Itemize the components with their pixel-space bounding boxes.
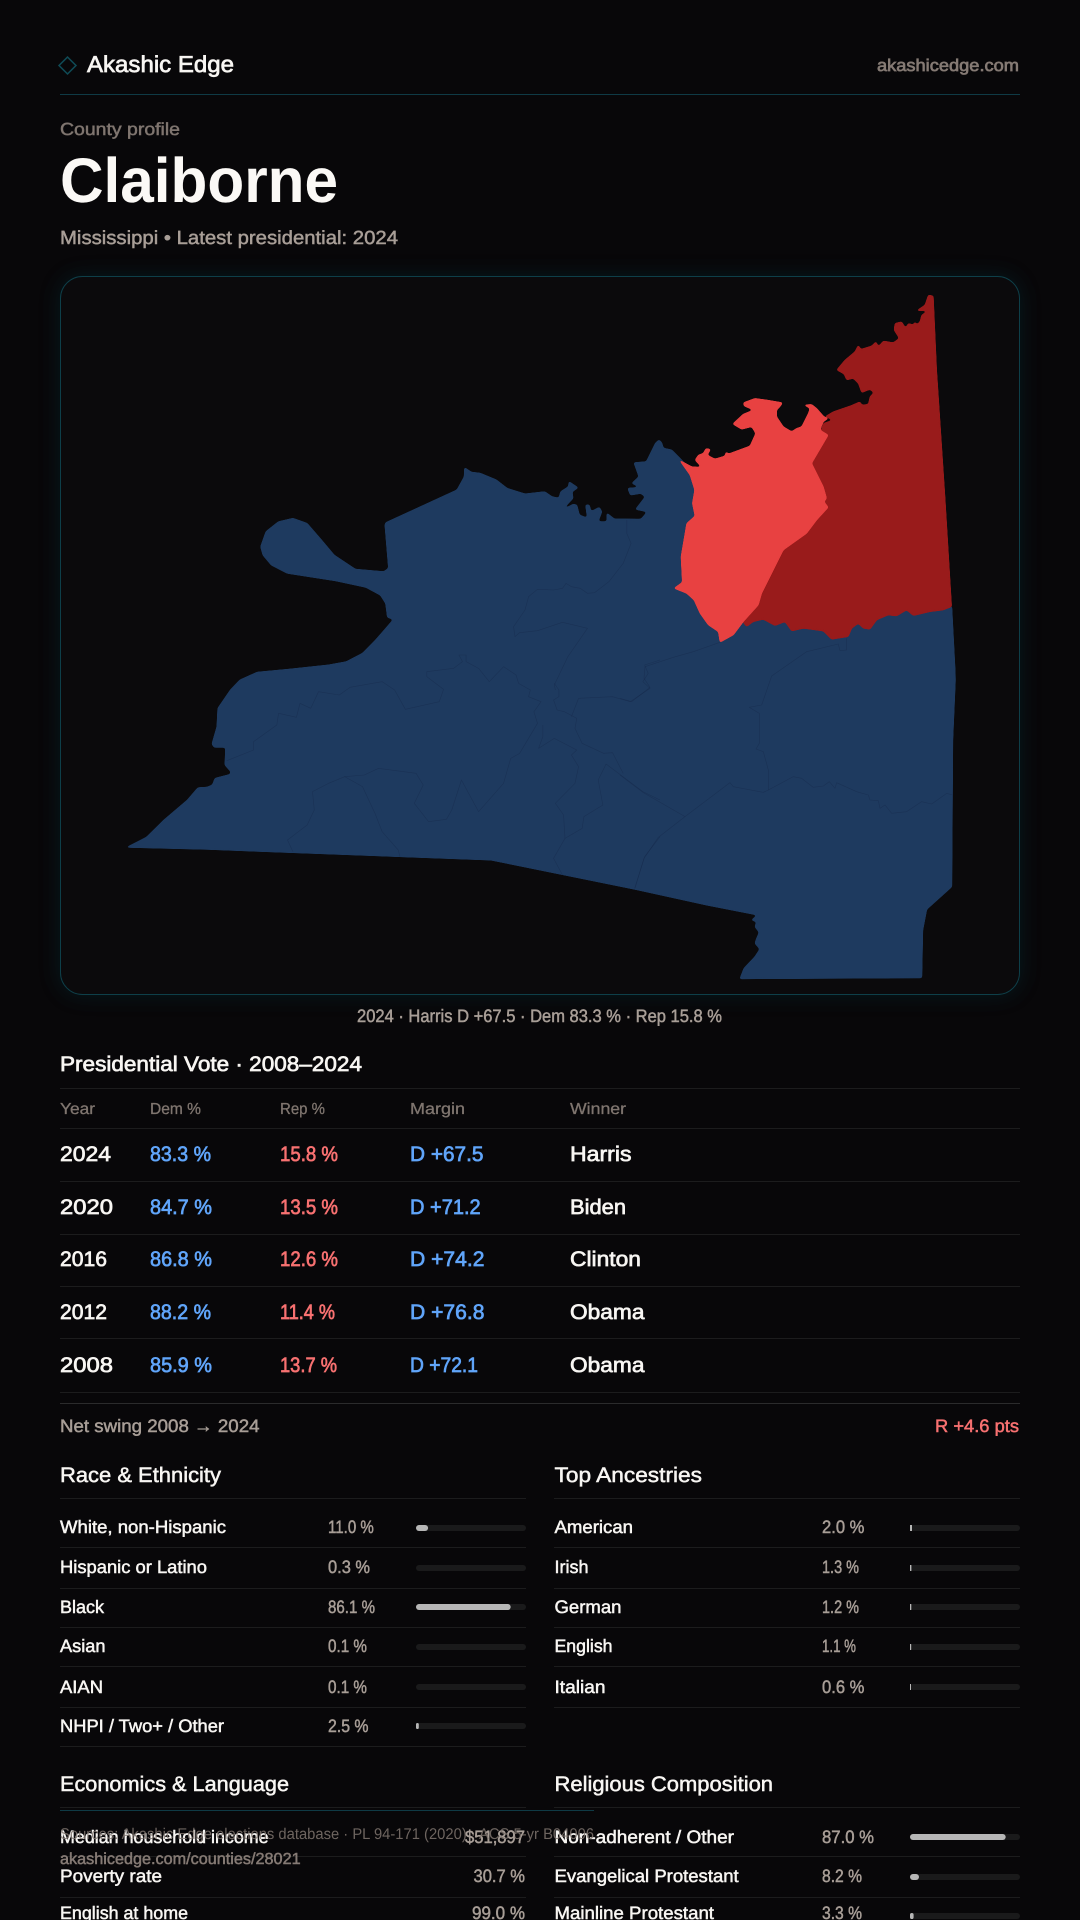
- title: Claiborne: [60, 146, 338, 216]
- row: NHPI / Two+ / Other: 2.5 %: [328, 1716, 368, 1736]
- map: blue precincts: [127, 440, 955, 979]
- row: Poverty rate: Poverty rate: [60, 1866, 162, 1886]
- table header row: Rep %: [280, 1101, 325, 1118]
- row: Irish: Irish: [554, 1557, 588, 1577]
- table row: 2020: 2020: [60, 1196, 113, 1219]
- icon: diamond logo: [59, 57, 76, 74]
- row: White, non-Hispanic: White, non-Hispanic: [60, 1517, 226, 1537]
- table row: 2008: [60, 1354, 645, 1377]
- table row: 2012: Obama: [570, 1301, 645, 1324]
- row: Poverty rate: [60, 1866, 525, 1886]
- footer: sources: [60, 1810, 594, 1868]
- county url: akashicedge.com/counties/28021: [60, 1851, 301, 1868]
- map: dark red precinct: [743, 295, 952, 639]
- table header row: Winner: [570, 1101, 627, 1118]
- row: Italian: Italian: [554, 1677, 606, 1697]
- row: German: [554, 1597, 1020, 1617]
- row: Italian: [554, 1677, 1020, 1697]
- net swing row: Net swing 2008 → 2024: [60, 1416, 260, 1436]
- row: Black: Black: [60, 1597, 105, 1617]
- table header row: Year: [60, 1101, 96, 1118]
- net swing row: R +4.6 pts: [935, 1416, 1019, 1436]
- row: Italian: 0.6 %: [822, 1677, 864, 1697]
- table row: 2008: Obama: [570, 1354, 645, 1377]
- eyebrow: County profile: [60, 119, 180, 139]
- table row: 2012: D +76.8: [410, 1301, 484, 1324]
- table row: 2012: [60, 1301, 645, 1324]
- section heading: Race & Ethnicity: [60, 1464, 222, 1487]
- panel glow: [60, 276, 1020, 995]
- row: English: 1.1 %: [822, 1636, 856, 1656]
- row: American: 2.0 %: [822, 1517, 864, 1537]
- row: Irish: 1.3 %: [822, 1557, 859, 1577]
- table row: 2020: Biden: [570, 1196, 626, 1219]
- row: Asian: [60, 1636, 526, 1656]
- map: precinct borders: [227, 520, 952, 888]
- header: [59, 51, 1020, 94]
- table header row: [60, 1101, 627, 1118]
- table header row: Margin: [410, 1101, 465, 1118]
- row: Non-adherent / Other: Non-adherent / Other: [554, 1827, 734, 1847]
- row: AIAN: AIAN: [60, 1677, 103, 1697]
- table header row: Dem %: [150, 1101, 201, 1118]
- row: White, non-Hispanic: [60, 1517, 526, 1537]
- map: light red precinct: [674, 398, 828, 642]
- table row: 2020: 84.7 %: [150, 1196, 212, 1219]
- row: Evangelical Protestant: 8.2 %: [822, 1866, 862, 1886]
- row: Hispanic or Latino: Hispanic or Latino: [60, 1557, 207, 1577]
- table row: 2012: 11.4 %: [280, 1301, 335, 1324]
- row: Median household income: $51,897: [465, 1827, 525, 1847]
- row: English: English: [554, 1636, 612, 1656]
- net swing row: [60, 1404, 1020, 1436]
- row: AIAN: [60, 1677, 526, 1697]
- table row: 2020: D +71.2: [410, 1196, 481, 1219]
- row: English: [554, 1636, 1020, 1656]
- table row: 2024: [60, 1143, 632, 1166]
- panel: presidential vote table: [60, 1053, 1020, 1392]
- row: German: 1.2 %: [822, 1597, 859, 1617]
- row: Evangelical Protestant: Evangelical Protestant: [554, 1866, 739, 1886]
- row: Poverty rate: 30.7 %: [474, 1866, 525, 1886]
- panel: economics and language: [60, 1773, 526, 1920]
- row: Median household income: [60, 1827, 525, 1847]
- panel: religious composition: [554, 1773, 1020, 1920]
- table row: 2024: 83.3 %: [150, 1143, 211, 1166]
- row: Non-adherent / Other: [554, 1827, 1020, 1847]
- table row: 2008: 85.9 %: [150, 1354, 212, 1377]
- table row: 2024: D +67.5: [410, 1143, 484, 1166]
- row: NHPI / Two+ / Other: [60, 1716, 526, 1736]
- row: Evangelical Protestant: [554, 1866, 1020, 1886]
- row: American: [554, 1517, 1020, 1537]
- row: Median household income: Median household income: [60, 1827, 269, 1847]
- table row: 2024: 15.8 %: [280, 1143, 338, 1166]
- row: American: American: [554, 1517, 633, 1537]
- table row: 2024: Harris: [570, 1143, 632, 1166]
- panel: race and ethnicity: [60, 1464, 526, 1746]
- row: Asian: 0.1 %: [328, 1636, 367, 1656]
- table row: 2008: 2008: [60, 1354, 113, 1377]
- section heading: Top Ancestries: [554, 1464, 702, 1487]
- row: Asian: Asian: [60, 1636, 106, 1656]
- table row: 2016: [60, 1248, 641, 1271]
- section heading: Economics & Language: [60, 1773, 289, 1796]
- table row: 2008: D +72.1: [410, 1354, 478, 1377]
- table row: 2008: 13.7 %: [280, 1354, 337, 1377]
- table row: 2016: 12.6 %: [280, 1248, 338, 1271]
- brand name: Akashic Edge: [87, 51, 234, 77]
- subtitle: Mississippi • Latest presidential: 2024: [60, 228, 398, 249]
- row: Hispanic or Latino: [60, 1557, 526, 1577]
- table heading: Presidential Vote · 2008–2024: [60, 1053, 362, 1076]
- table row: 2020: 13.5 %: [280, 1196, 338, 1219]
- table row: 2020: [60, 1196, 626, 1219]
- table row: 2016: 86.8 %: [150, 1248, 212, 1271]
- row: Irish: [554, 1557, 1020, 1577]
- row: Non-adherent / Other: 87.0 %: [822, 1827, 874, 1847]
- panel: top ancestries: [554, 1464, 1020, 1708]
- row: English at home: [60, 1903, 525, 1920]
- table row: 2012: 88.2 %: [150, 1301, 211, 1324]
- row: Mainline Protestant: [554, 1903, 1020, 1920]
- row: German: German: [554, 1597, 622, 1617]
- table row: 2016: Clinton: [570, 1248, 641, 1271]
- table row: 2024: 2024: [60, 1143, 111, 1166]
- source note: Sources: Akashic Edge elections database · PL 94-171 (2020) · ACS 5-yr B04006: [60, 1826, 594, 1843]
- table row: 2012: 2012: [60, 1301, 107, 1324]
- row: Hispanic or Latino: 0.3 %: [328, 1557, 370, 1577]
- row: NHPI / Two+ / Other: NHPI / Two+ / Other: [60, 1716, 224, 1736]
- row: AIAN: 0.1 %: [328, 1677, 367, 1697]
- panel frame: [60, 276, 1020, 994]
- section heading: Religious Composition: [554, 1773, 773, 1796]
- panel: county map: [60, 276, 1020, 995]
- site url: akashicedge.com: [877, 56, 1019, 75]
- header rule: [60, 94, 1020, 96]
- row: Black: 86.1 %: [328, 1597, 375, 1617]
- title block: [60, 119, 398, 249]
- row: White, non-Hispanic: 11.0 %: [328, 1517, 374, 1537]
- row: Black: [60, 1597, 526, 1617]
- table row: 2016: 2016: [60, 1248, 107, 1271]
- table row: 2016: D +74.2: [410, 1248, 484, 1271]
- map caption: 2024 · Harris D +67.5 · Dem 83.3 % · Rep 15.8 %: [357, 1006, 722, 1026]
